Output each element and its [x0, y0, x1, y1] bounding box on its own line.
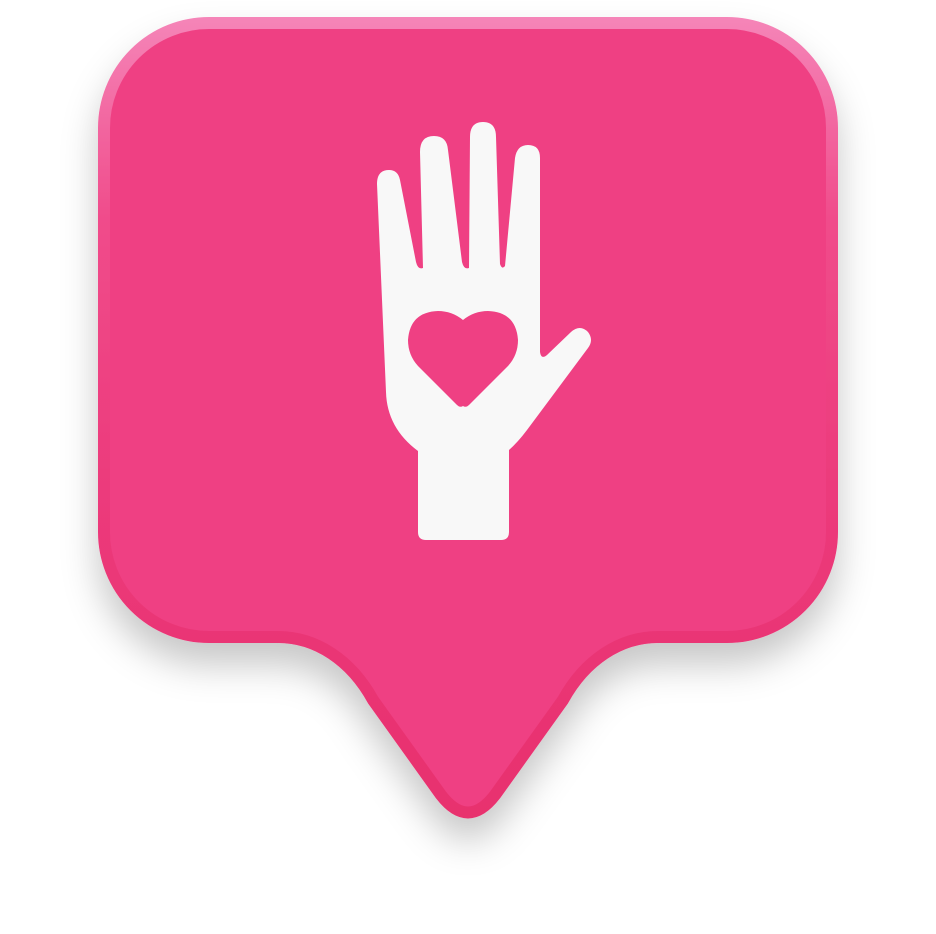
pin shape: [104, 23, 832, 812]
icon: hand with heart: [377, 122, 591, 540]
